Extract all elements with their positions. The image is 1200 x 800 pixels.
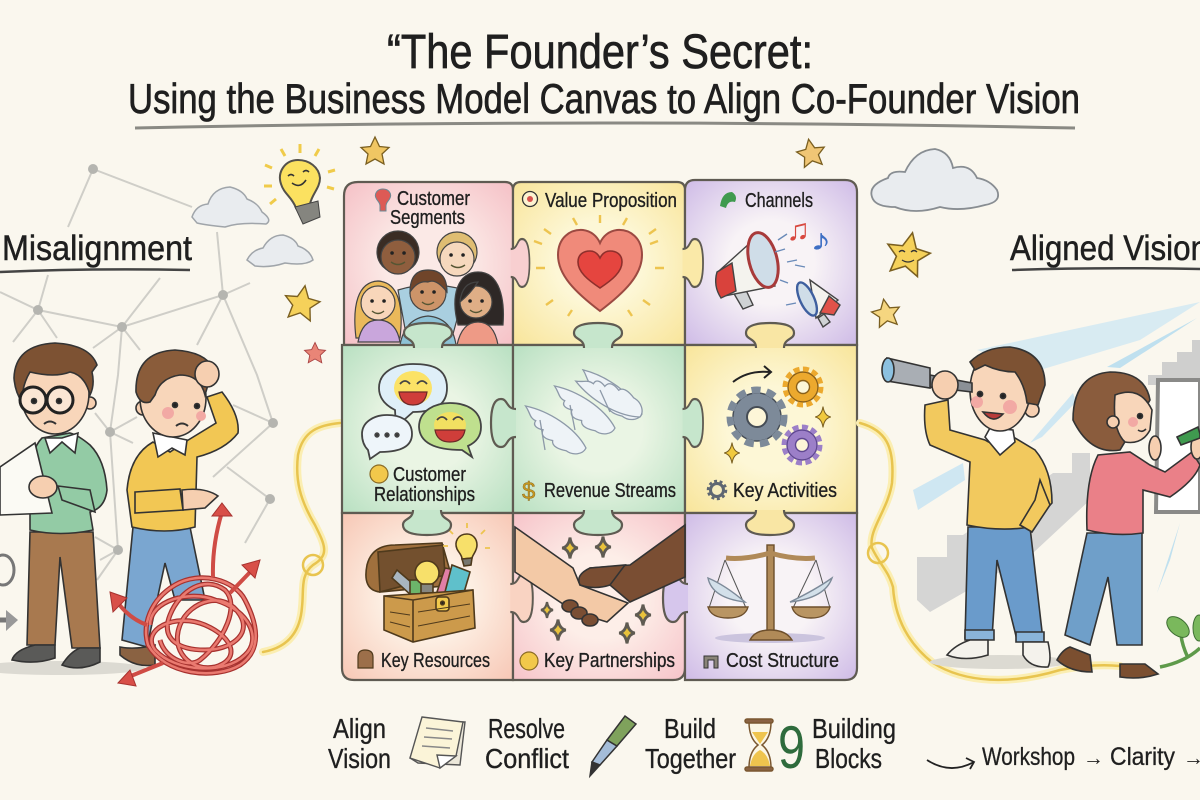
panel: cost structure [685,513,857,680]
icon: speech bubbles [362,364,481,459]
figure: founder drawing at board [1057,372,1200,678]
icon: gears and arrow [724,366,831,463]
panel: value proposition [513,182,685,345]
icon: pen [590,716,636,776]
icon: heart with rays [534,215,664,316]
label: build together: Build [664,713,716,744]
label: align vision: Align [333,713,386,744]
stars left [282,137,389,363]
right cloud [871,149,998,211]
footer labels [328,713,1200,781]
label: resolve conflict [485,713,569,774]
arrow flow: workshop to clarity [927,743,1200,771]
icon: hourglass [745,719,773,771]
panel: revenue streams [513,345,685,513]
panel: customer relationships [342,345,513,513]
icon: document [410,717,465,768]
number nine: 9 [778,714,805,781]
icon: treasure chest with bulb [366,523,490,642]
panel: key partnerships [513,513,685,680]
panel: value proposition: Value Proposition [545,190,677,212]
panel: key activities: Key Activities [733,480,837,502]
panel: key activities [685,345,857,513]
title: “The Founder’s Secret: [387,26,813,79]
panel: channels [685,180,857,345]
title [128,26,1080,128]
icon: tangled red arrows [110,503,260,686]
label: build together: Together [645,743,736,774]
connector: right golden path [860,423,1120,680]
clouds left [192,187,313,267]
heading: misalignment: Misalignment [2,229,192,268]
label: resolve conflict: Resolve [488,713,565,744]
label: resolve conflict: Conflict [485,743,569,774]
background: stairs and light beams [913,302,1200,612]
icon: light bulb [264,144,335,224]
panel: key partnerships: Key Partnerships [544,650,675,672]
figure: founder with glasses and papers [0,343,145,675]
label: build together [645,713,736,774]
panel: key resources: Key Resources [381,650,490,672]
figure: founder with telescope [882,347,1070,669]
icon: megaphones and notes [716,214,840,327]
panel: cost structure: Cost Structure [726,650,839,672]
icon: balance scale [708,545,832,643]
connector: left golden path [263,423,340,652]
label: align vision [328,713,391,774]
panel: channels: Channels [745,190,813,212]
panel: customer relationships: Customer [393,464,466,486]
label: building blocks: Building [812,713,896,744]
figure: confused founder in yellow sweater [120,350,238,666]
arrow flow: workshop to clarity: Clarity [1110,743,1175,771]
panel: key resources [342,513,513,680]
icon: grey chain and arrow at left edge [0,555,18,631]
icon: group of people [355,231,503,345]
icon: handshake [515,525,685,626]
panel: customer segments [344,182,513,345]
panel: customer relationships: Relationships [374,484,475,506]
arrow flow: workshop to clarity: Workshop [982,743,1075,771]
icon: megaphones and notes: ♪ [810,224,832,257]
panel: revenue streams: Revenue Streams [544,480,676,502]
background network: misalignment [0,164,278,580]
arrow flow: workshop to clarity: → [1083,745,1104,770]
panel: revenue streams: $ [522,478,535,505]
label: align vision: Vision [328,743,391,774]
puzzle tabs [403,239,794,622]
icon: plant sprout [1160,613,1200,667]
panel: customer segments: Segments [390,207,465,229]
icon: flying wings [526,364,644,460]
stars right [795,137,934,328]
panel backgrounds and canvas [342,180,857,680]
label: building blocks: Blocks [815,743,882,774]
panel: customer segments: Customer [397,188,470,210]
label: building blocks [812,713,896,774]
icon: megaphones and notes: ♫ [786,214,810,247]
